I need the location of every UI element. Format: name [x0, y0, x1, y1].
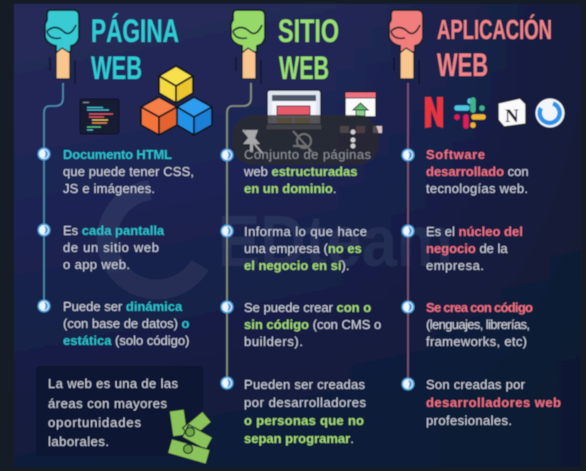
- icon: home page: [345, 92, 376, 117]
- text: con o sin código: sin código (con CMS o: [244, 317, 381, 332]
- icon: red hand: [389, 10, 423, 84]
- text: se crea con código: frameworks, etc): [426, 334, 527, 349]
- text: son creadas por: Son creadas por: [426, 377, 526, 392]
- title: aplicación web: [437, 14, 552, 83]
- watermark logo: [107, 190, 453, 290]
- text: pueden ser creadas: o personas que no: [244, 413, 364, 428]
- bullets: sitio web: [220, 148, 234, 390]
- cube: css: [177, 97, 212, 135]
- icon: browser monitor: [266, 90, 322, 130]
- icon: pin off: [243, 130, 262, 153]
- text: núcleo del negocio: empresa.: [426, 258, 484, 273]
- connector line: página web: [44, 83, 63, 306]
- text: son creadas por: desarrolladores web: [426, 395, 561, 410]
- text: con o sin código: builders).: [244, 334, 303, 349]
- text: pueden ser creadas: sepan programar.: [244, 431, 354, 446]
- connector line: aplicación web: [407, 83, 409, 384]
- text: conjunto de páginas: web estructuradas: [244, 164, 357, 179]
- text: informa lo que hace: una empresa (no es: [244, 241, 362, 256]
- icon: code cubes: [141, 66, 212, 135]
- icon: code editor: [80, 99, 119, 134]
- icon: netflix: [425, 97, 443, 128]
- text: dinámica o estática: (con base de datos) o: [63, 316, 189, 331]
- cube: html: [141, 97, 177, 135]
- text: software desarrollado: tecnologías web.: [426, 181, 528, 196]
- bullets: página web: [38, 148, 50, 312]
- text: pueden ser creadas: por desarrolladores: [244, 395, 366, 410]
- text: con o sin código: Se puede crear con o: [244, 300, 371, 315]
- text: núcleo del negocio: negocio de la: [426, 241, 508, 256]
- icon: notion: [498, 98, 526, 127]
- callout: oportunidades laborales: La web es una de las: [48, 376, 178, 391]
- icon: more options: [350, 130, 356, 148]
- icon: site map: [340, 126, 382, 133]
- title: sitio web: WEB: [279, 50, 329, 86]
- title: sitio web: SITIO: [278, 13, 339, 49]
- icon: blue ring app: [536, 98, 564, 128]
- bullets: aplicación web: [402, 148, 414, 390]
- text: cada pantalla: o app web.: [63, 257, 130, 272]
- text: cada pantalla: Es cada pantalla: [63, 223, 164, 238]
- text: dinámica o estática: estática (solo código): [63, 333, 189, 348]
- callout: oportunidades laborales: [36, 366, 203, 456]
- text: cada pantalla: de un sitio web: [63, 240, 159, 255]
- icon: notion: N: [505, 106, 519, 127]
- icon: microphone off: [293, 131, 312, 152]
- callout: oportunidades laborales: oportunidades: [48, 415, 142, 430]
- text: dinámica o estática: Puede ser dinámica: [63, 299, 182, 314]
- title: página web: [91, 13, 179, 86]
- text: se crea con código: Se crea con código: [426, 300, 533, 315]
- watermark logo: EDteam: [218, 202, 453, 282]
- text: pueden ser creadas: Pueden ser creadas: [244, 377, 366, 392]
- title: página web: PÁGINA: [91, 13, 179, 49]
- text: documento html: que puede tener CSS,: [63, 164, 194, 179]
- cube: js: [159, 66, 193, 103]
- text: documento html: JS e imágenes.: [63, 181, 155, 196]
- text: se crea con código: (lenguajes, librerías,: [426, 317, 530, 332]
- icon: money bills: [168, 409, 213, 464]
- text: documento html: Documento HTML: [63, 147, 172, 162]
- icon: green hand: [231, 10, 265, 84]
- text: son creadas por: profesionales.: [426, 413, 512, 428]
- title: página web: WEB: [91, 50, 142, 86]
- title: aplicación web: WEB: [437, 47, 488, 83]
- text: informa lo que hace: el negocio en sí).: [244, 258, 349, 273]
- text: conjunto de páginas: en un dominio.: [244, 181, 336, 196]
- icon: slack: [457, 100, 483, 126]
- callout: oportunidades laborales: laborales.: [48, 434, 109, 449]
- text: informa lo que hace: Informa lo que hace: [244, 224, 367, 239]
- title: sitio web: [278, 13, 339, 86]
- text: software desarrollado: desarrollado con: [426, 164, 529, 179]
- text: núcleo del negocio: Es el núcleo del: [426, 224, 523, 239]
- video overlay bar: [232, 115, 379, 165]
- text: conjunto de páginas: Conjunto de páginas: [244, 147, 372, 162]
- connector line: sitio web: [227, 83, 251, 383]
- text: software desarrollado: Software: [426, 147, 485, 162]
- callout: oportunidades laborales: áreas con mayores: [48, 396, 168, 411]
- icon: cyan hand: [45, 10, 79, 84]
